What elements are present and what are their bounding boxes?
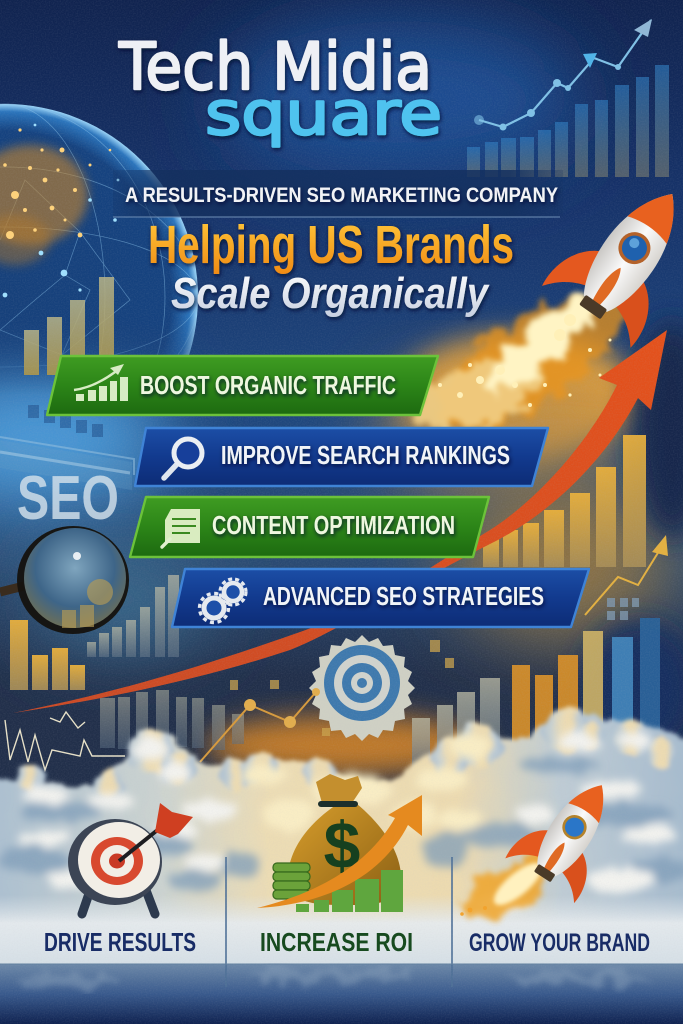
growth bars [296,870,403,912]
headline line 1: Helping US Brands [148,215,514,275]
small rocket [505,762,637,903]
logo line 2: square [205,79,442,149]
center-right bars [483,435,646,567]
tagline band [113,170,563,217]
small squares [607,598,639,620]
button label: BOOST ORGANIC TRAFFIC [140,370,396,400]
icon: document [162,509,200,547]
button: boost organic traffic [47,356,438,415]
button label: IMPROVE SEARCH RANKINGS [221,440,510,470]
SEO browser panel [0,405,134,533]
small rising line right [585,535,668,615]
base band [0,964,683,1024]
upper-left bars [24,277,114,375]
tagline: A RESULTS-DRIVEN SEO MARKETING COMPANY [125,184,558,207]
label: drive results: DRIVE RESULTS [44,927,196,957]
dollar sign: $ [324,808,360,882]
icon: traffic bars [74,364,128,401]
label: increase roi: INCREASE ROI [260,927,413,957]
headline line 2: Scale Organically [171,269,490,318]
icon: gears [200,579,246,622]
headline [148,215,514,318]
orange arrow [257,795,422,908]
small rocket flame [452,846,558,930]
large orange growth arrow [13,330,667,713]
button: advanced seo strategies [172,569,589,627]
node line chart [5,688,320,770]
lower-right bars [412,618,660,770]
globe with network [0,104,198,384]
column dividers [0,857,683,987]
rocket flame [409,271,642,449]
logo [118,30,442,149]
large rocket [541,163,683,348]
logo line 1: Tech Midia [118,30,432,105]
button label: CONTENT OPTIMIZATION [212,510,455,540]
button: content optimization [130,497,489,557]
icon: magnifier [164,439,202,478]
top-right bar chart with rising line [467,19,669,177]
SEO label: SEO [17,464,119,533]
coins [273,863,310,899]
lower-left chart bars [10,575,244,750]
scattered gold squares [230,640,454,736]
button: improve search rankings [135,428,548,486]
clouds [0,708,683,975]
button label: ADVANCED SEO STRATEGIES [263,581,544,611]
gear target [309,635,415,741]
magnifying glass [0,526,129,634]
target with arrow [68,803,193,914]
money bag with arrow [257,774,422,912]
